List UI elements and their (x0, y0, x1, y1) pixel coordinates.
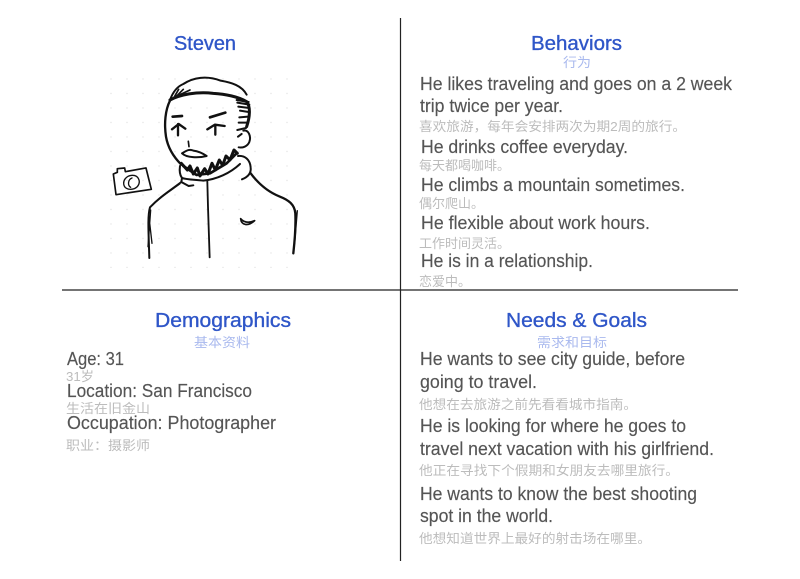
subheading: 基本资料: 基本资料 (194, 335, 250, 350)
panel: Steven (108, 33, 302, 268)
behavior: coffee: He drinks coffee everyday. (421, 137, 628, 157)
need: shooting spot: He wants to know the best shooting (420, 484, 697, 504)
age: Age: 31 (67, 349, 124, 369)
heading: Steven: Steven (174, 33, 236, 55)
behavior: travel: He likes traveling and goes on a 2 week (420, 74, 733, 94)
panel: Needs and Goals: 他想知道世界上最好的射击场在哪里。 (419, 531, 651, 546)
panel: Behaviors: trip twice per year. (420, 96, 563, 116)
panel: Needs and Goals: 他想在去旅游之前先看看城市指南。 (419, 397, 637, 412)
occupation: Occupation: Photographer (67, 413, 276, 433)
panel: Needs and Goals: spot in the world. (420, 506, 553, 526)
heading: Demographics: Demographics (155, 310, 291, 332)
panel: Needs and Goals: going to travel. (420, 372, 537, 392)
icon: camera (113, 168, 151, 195)
panel: Behaviors: 喜欢旅游，每年会安排两次为期2周的旅行。 (419, 119, 686, 134)
heading: Needs & Goals: Needs & Goals (506, 310, 647, 332)
panel: Demographics: 31岁 (66, 369, 94, 384)
panel: Behaviors: 每天都喝咖啡。 (419, 158, 510, 173)
heading: Behaviors: Behaviors (531, 33, 622, 55)
panel: Behaviors: 恋爱中。 (419, 274, 471, 289)
dotted sketch background (108, 76, 302, 268)
behavior: work hours: He flexible about work hours. (421, 213, 650, 233)
panel: Behaviors: 工作时间灵活。 (419, 236, 510, 251)
beard (181, 150, 237, 176)
jacket (148, 156, 297, 258)
hair and head (165, 78, 250, 165)
panel: Needs and Goals (419, 310, 714, 546)
location: Location: San Francisco (67, 381, 252, 401)
panel: Demographics: 职业：摄影师 (66, 438, 150, 453)
need: next vacation: He is looking for where he goes to (420, 416, 686, 436)
subheading: 行为: 行为 (563, 55, 591, 70)
behavior: climbing: He climbs a mountain sometimes. (421, 175, 685, 195)
panel: Needs and Goals: travel next vacation with his girlfriend. (420, 439, 714, 459)
need: city guide: He wants to see city guide, before (420, 349, 685, 369)
behavior: relationship: He is in a relationship. (421, 251, 593, 271)
panel: Behaviors (419, 33, 733, 289)
panel: Demographics: 生活在旧金山 (66, 401, 150, 416)
panel: Behaviors: 偶尔爬山。 (419, 196, 484, 211)
face (172, 113, 225, 157)
panel: Needs and Goals: 他正在寻找下个假期和女朋友去哪里旅行。 (419, 463, 679, 478)
portrait sketch (113, 78, 297, 258)
subheading: 需求和目标: 需求和目标 (537, 335, 607, 350)
panel: Demographics (66, 310, 291, 453)
